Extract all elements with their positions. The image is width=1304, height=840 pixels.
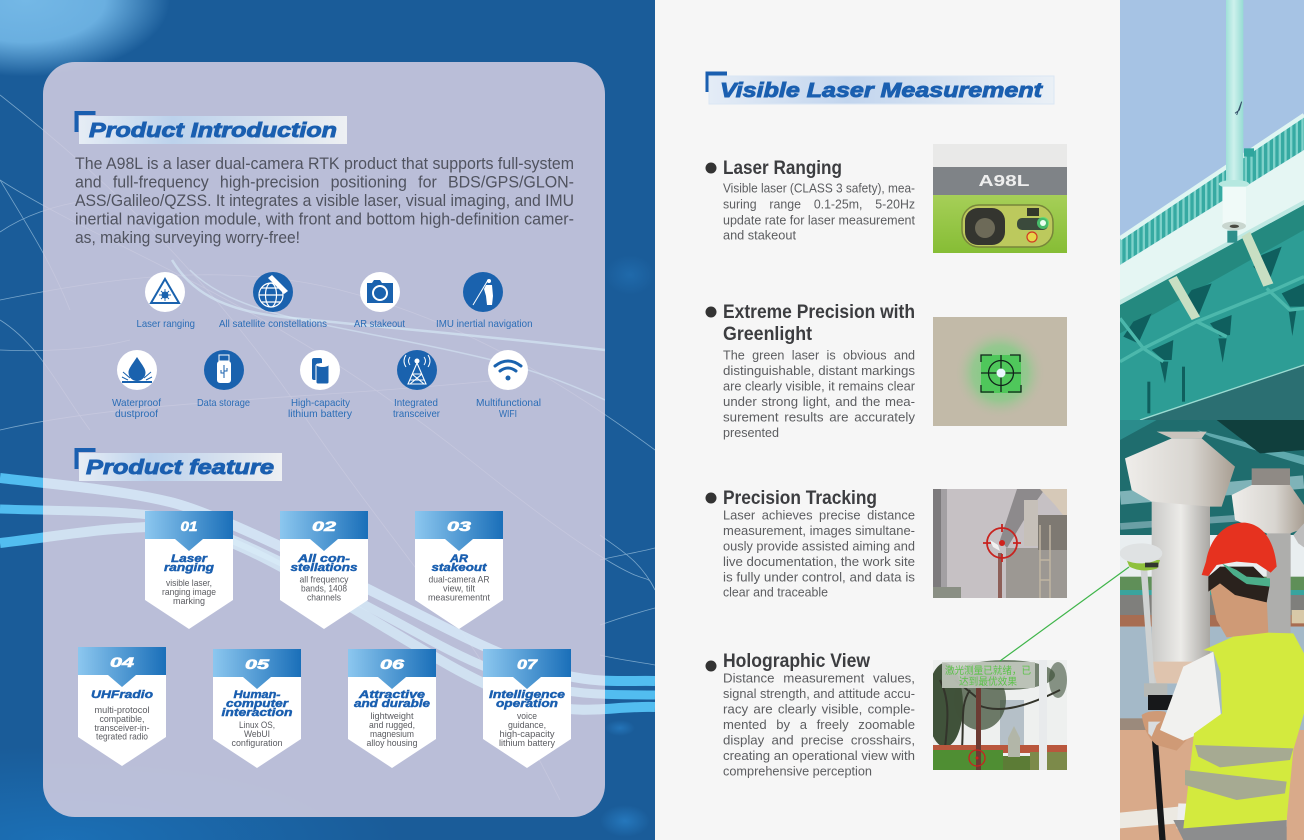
text block: product introduction: as, making surveying worry-free! (75, 229, 300, 247)
section: Extreme Precision with Greenlight: surement results are accurately (723, 410, 916, 424)
card: 04 UHF radio (78, 647, 166, 766)
section: Extreme Precision with Greenlight (706, 301, 916, 440)
card: 04 UHF radio: UHFradio (91, 689, 153, 701)
card: 04 UHF radio: tegrated radio (96, 732, 148, 742)
section: Holographic View: display and precise crosshairs, (723, 732, 915, 748)
card: 03 AR stakeout: stakeout (432, 562, 488, 574)
text block: product introduction: and full-frequency high-precision positioning for BDS/GPS/GLON- (75, 174, 574, 192)
section: Holographic View: Distance measurement values, (723, 670, 915, 686)
card: 07 Intelligence operation: high-capacity (500, 729, 555, 740)
card: 06 Attractive and durable: lightweight (370, 711, 414, 722)
photo: holographic street view: 达到最优效果 (959, 675, 1017, 688)
card: 04 UHF radio: 04 (110, 654, 134, 670)
card: 06 Attractive and durable: Attractive (358, 689, 425, 701)
card: 05 Human-computer interaction: configuration (232, 738, 282, 749)
section: Precision Tracking: Laser achieves precise distance (723, 508, 915, 522)
icon: all satellite constellations (253, 272, 293, 312)
card: 03 AR stakeout: dual-camera AR (428, 574, 490, 586)
card: 04 UHF radio: transceiver-in- (94, 723, 150, 734)
section: Holographic View (706, 650, 915, 778)
section: Holographic View: comprehensive perception (723, 764, 872, 778)
card: 05 Human-computer interaction: Human- (234, 689, 281, 701)
card: 07 Intelligence operation: lithium battery (499, 738, 555, 749)
card: 05 Human-computer interaction: 05 (245, 656, 269, 672)
section: Extreme Precision with Greenlight: are clearly visible, it remains clear (723, 378, 916, 394)
section: Laser Ranging: update rate for laser measurement (723, 212, 915, 228)
card: 01 Laser ranging: 01 (180, 518, 198, 534)
card: 05 Human-computer interaction (213, 649, 301, 768)
heading: Product feature (74, 448, 282, 481)
heading: Product feature: Product feature (86, 456, 274, 479)
icon: waterproof (117, 350, 157, 390)
card: 06 Attractive and durable: alloy housing (366, 738, 418, 749)
panel: frosted product card (43, 62, 605, 817)
text block: product introduction: inertial navigation module, with front and bottom high-definition camer- (75, 210, 574, 228)
section: Extreme Precision with Greenlight: distinguishable, distant markings (723, 363, 915, 378)
section: Extreme Precision with Greenlight: under strong light, and the mea- (723, 394, 915, 409)
label: High-capacity lithium battery: High-capacity (291, 397, 351, 409)
section: Precision Tracking: ously provide assisted aiming and (723, 538, 915, 554)
heading: Product Introduction: Product Introduction (89, 119, 337, 142)
card: 07 Intelligence operation: 07 (517, 656, 539, 672)
card: 06 Attractive and durable: magnesium (370, 729, 414, 740)
card: 05 Human-computer interaction: interaction (222, 707, 293, 719)
card: 04 UHF radio: compatible, (100, 714, 144, 725)
section: Holographic View: signal strength, and attitude accu- (723, 686, 915, 701)
icon: AR stakeout camera (360, 272, 400, 312)
card: 05 Human-computer interaction: computer (226, 698, 289, 710)
card: 01 Laser ranging (145, 511, 233, 629)
label: High-capacity lithium battery: lithium battery (288, 408, 353, 420)
section: Extreme Precision with Greenlight: Greenlight (723, 323, 812, 345)
section: Extreme Precision with Greenlight: Extreme Precision with (723, 301, 915, 323)
heading: Product Introduction (74, 111, 347, 144)
label: Multifunctional WIFI: WIFI (499, 408, 517, 420)
section: Holographic View: mented by a freely zoomable (723, 717, 915, 732)
photo: green laser on target (933, 317, 1067, 426)
bridge upper section (1120, 0, 1304, 420)
icon: data storage USB (204, 350, 244, 390)
label: All satellite constellations: All satellite constellations (219, 318, 327, 330)
card: 01 Laser ranging: ranging image (162, 587, 216, 598)
card: 01 Laser ranging: Laser (171, 553, 208, 565)
label: High-capacity lithium battery (288, 397, 353, 420)
card: 05 Human-computer interaction: Linux OS, (239, 720, 275, 731)
label: IMU inertial navigation: IMU inertial navigation (436, 318, 533, 330)
section: Holographic View: Holographic View (723, 650, 871, 672)
section: Laser Ranging: and stakeout (723, 228, 796, 242)
card: 06 Attractive and durable: and rugged, (369, 720, 415, 731)
card: 03 AR stakeout: view, tilt (443, 584, 475, 594)
label: Integrated transceiver: Integrated (394, 397, 438, 409)
section: Holographic View: racy are clearly visible, comple- (723, 702, 915, 716)
photo: holographic street view (927, 660, 1067, 770)
card: 07 Intelligence operation: voice (517, 711, 537, 722)
card: 02 All constellations (280, 511, 368, 629)
photo: bridge, river and surveyor (1120, 0, 1304, 840)
card: 02 All constellations: channels (307, 592, 341, 604)
label: Multifunctional WIFI (476, 397, 541, 420)
section: Extreme Precision with Greenlight: The green laser is obvious and (723, 348, 915, 362)
arrow: green laser beam (1000, 567, 1129, 661)
card: 02 All constellations: 02 (312, 518, 336, 534)
section: Precision Tracking: live documentation, the work site (723, 554, 915, 569)
icon: WIFI (488, 350, 528, 390)
card: 02 All constellations: stellations (290, 562, 358, 574)
text block: product introduction (75, 155, 574, 247)
section: Holographic View: creating an operational view with (723, 748, 915, 763)
worker (1142, 523, 1304, 840)
panel: light right page (655, 0, 1120, 840)
photo: A98L receiver laser window: A98L (978, 173, 1030, 190)
surveying pole and receiver (1120, 543, 1173, 840)
label: Laser ranging: Laser ranging (136, 318, 195, 330)
card: 02 All constellations: bands, 1408 (301, 584, 347, 594)
icon: lithium battery (300, 350, 340, 390)
card: 03 AR stakeout: AR (449, 553, 468, 565)
bridge underside, river and piers (1120, 420, 1304, 840)
label: Data storage: Data storage (197, 397, 250, 409)
photo: holographic street view: 激光测量已就绪，已 (945, 664, 1031, 677)
card: 03 AR stakeout: measurementnt (428, 592, 490, 604)
card: 02 All constellations: all frequency (300, 574, 349, 586)
section: Laser Ranging (706, 157, 915, 242)
heading: Visible Laser Measurement (706, 72, 1054, 104)
card: 06 Attractive and durable: and durable (354, 698, 430, 710)
text block: product introduction: ASS/Galileo/QZSS. It integrates a visible laser, visual imaging, and IMU (75, 192, 574, 210)
card: 02 All constellations: All con- (297, 553, 350, 565)
heading: Visible Laser Measurement: Visible Laser Measurement (720, 79, 1043, 102)
section: Precision Tracking (706, 487, 916, 600)
icon: laser ranging (145, 272, 185, 312)
card: 01 Laser ranging: marking (173, 596, 205, 607)
text block: product introduction: The A98L is a laser dual-camera RTK product that supports full-system (75, 155, 574, 173)
section: Laser Ranging: suring range 0.1-25m, 5-20Hz (723, 196, 915, 212)
label: Waterproof dustproof (112, 397, 161, 420)
card: 01 Laser ranging: visible laser, (166, 578, 212, 589)
label: Waterproof dustproof: dustproof (115, 408, 158, 420)
section: Precision Tracking: measurement, images simultane- (723, 523, 915, 538)
section: Laser Ranging: Visible laser (CLASS 3 safety), mea- (723, 180, 915, 196)
card: 03 AR stakeout (415, 511, 503, 629)
label: Waterproof dustproof: Waterproof (112, 397, 161, 409)
card: 07 Intelligence operation: operation (496, 698, 558, 710)
background: blue technology backdrop (0, 0, 655, 840)
photo: A98L receiver laser window (933, 144, 1067, 253)
label: Multifunctional WIFI: Multifunctional (476, 397, 541, 409)
card: 04 UHF radio: multi-protocol (94, 705, 150, 716)
card: 07 Intelligence operation (483, 649, 571, 768)
icon: integrated transceiver tower (397, 350, 437, 390)
photo: tracking crosshair on site (933, 489, 1067, 598)
card: 03 AR stakeout: 03 (447, 518, 471, 534)
card: 01 Laser ranging: ranging (164, 562, 214, 574)
card: 06 Attractive and durable (348, 649, 436, 768)
section: Precision Tracking: Precision Tracking (723, 487, 877, 509)
card: 05 Human-computer interaction: WebUI (244, 729, 270, 740)
section: Laser Ranging: Laser Ranging (723, 157, 842, 179)
icon: IMU surveyor (463, 272, 503, 312)
card: 06 Attractive and durable: 06 (380, 656, 404, 672)
label: AR stakeout: AR stakeout (354, 318, 405, 330)
section: Precision Tracking: clear and traceable (723, 584, 828, 600)
card: 07 Intelligence operation: Intelligence (489, 689, 565, 701)
section: Precision Tracking: is fully under control, and data is (723, 570, 916, 584)
label: Integrated transceiver: transceiver (393, 408, 440, 420)
card: 07 Intelligence operation: guidance, (508, 720, 546, 731)
section: Extreme Precision with Greenlight: presented (723, 425, 779, 440)
label: Integrated transceiver (393, 397, 440, 420)
